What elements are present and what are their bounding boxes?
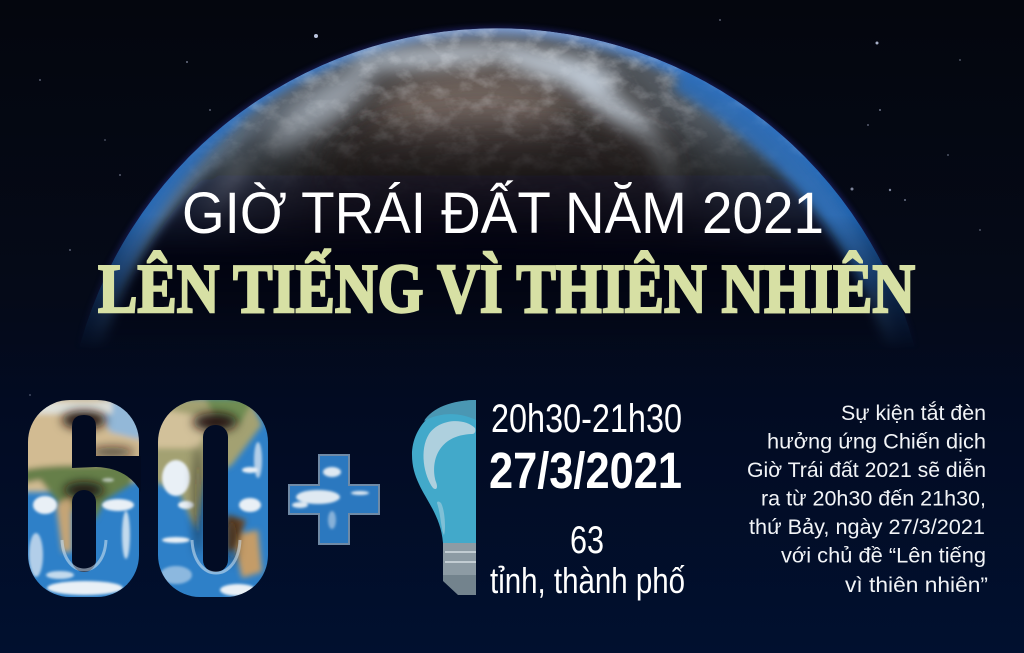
stars bbox=[29, 19, 981, 396]
earth night shadow bbox=[107, 116, 882, 342]
event date: 27/3/2021 bbox=[489, 442, 682, 499]
event time: 20h30-21h30 bbox=[491, 397, 682, 441]
description text block: hưởng ứng Chiến dịch bbox=[767, 430, 986, 454]
description text block: Giờ Trái đất 2021 sẽ diễn bbox=[747, 459, 986, 482]
digit 0 filled with earth imagery: 0 bbox=[157, 361, 269, 640]
description text block: vì thiên nhiên” bbox=[845, 574, 988, 597]
description text block: Sự kiện tắt đèn bbox=[841, 402, 986, 425]
title: Giờ Trái Đất năm 2021: GIỜ TRÁI ĐẤT NĂM 2021 bbox=[182, 181, 824, 246]
count: 63: 63 bbox=[570, 519, 604, 562]
digit 6 filled with earth imagery: 6 bbox=[27, 361, 139, 640]
description text block: với chủ đề “Lên tiếng bbox=[781, 544, 986, 568]
icon: half light bulb bbox=[412, 400, 476, 595]
label: provinces and cities: tỉnh, thành phố bbox=[490, 560, 685, 601]
description text block bbox=[747, 402, 988, 597]
description text block: thứ Bảy, ngày 27/3/2021 bbox=[749, 516, 985, 539]
earth bbox=[74, 26, 920, 360]
earth land bbox=[380, 67, 570, 163]
earth clouds bbox=[195, 40, 691, 227]
earth cloud texture bbox=[190, 28, 804, 170]
icon: plus sign bbox=[289, 455, 379, 544]
earth blue limb bbox=[680, 78, 872, 290]
description text block: ra từ 20h30 đến 21h30, bbox=[761, 488, 986, 510]
